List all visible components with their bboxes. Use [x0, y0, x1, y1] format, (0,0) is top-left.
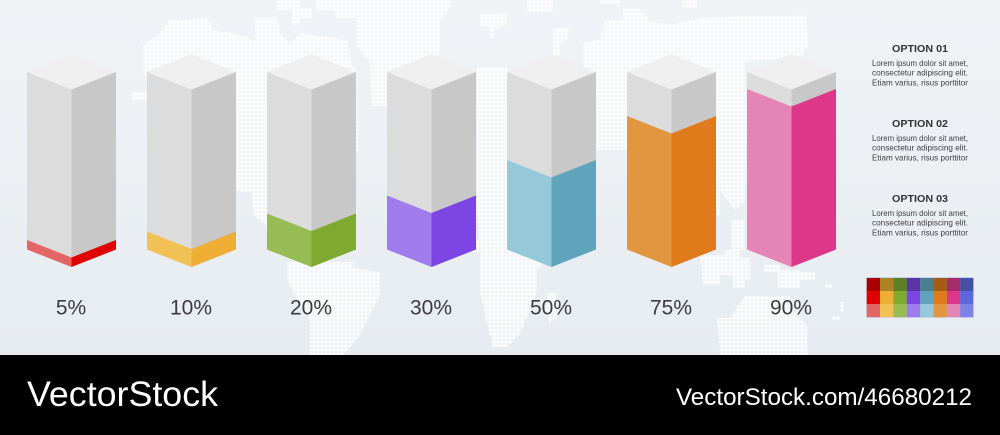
option 02 text: OPTION 02: [892, 118, 948, 130]
bar 10%: [147, 54, 236, 320]
footer image id: VectorStock.com/46680212: [676, 384, 972, 411]
bar 50%: 50%: [530, 296, 572, 320]
option 01 text: [872, 43, 968, 87]
bar 30%: 30%: [410, 296, 452, 320]
option 03 text: Etiam varius, risus porttitor: [872, 227, 968, 237]
bar 20%: [267, 54, 356, 320]
colour palette swatch: [866, 278, 974, 318]
bar 5%: 5%: [56, 296, 86, 320]
footer band: [0, 355, 1000, 435]
bar 90%: 90%: [770, 296, 812, 320]
bar 20%: 20%: [290, 296, 332, 320]
option 01 text: Lorem ipsum dolor sit amet,: [872, 58, 968, 68]
option 02 text: Etiam varius, risus porttitor: [872, 152, 968, 162]
option 03 text: OPTION 03: [892, 193, 948, 205]
bar 75%: 75%: [650, 296, 692, 320]
option 02 text: consectetur adipiscing elit.: [872, 143, 968, 153]
option 03 text: Lorem ipsum dolor sit amet,: [872, 208, 968, 218]
option 01 text: OPTION 01: [892, 43, 948, 55]
option 02 text: Lorem ipsum dolor sit amet,: [872, 133, 968, 143]
option 03 text: consectetur adipiscing elit.: [872, 218, 968, 228]
footer logo text: VectorStock: [27, 375, 219, 414]
bar 75%: [627, 54, 716, 320]
option 03 text: [872, 193, 968, 237]
bar 50%: [507, 54, 596, 320]
option 02 text: [872, 118, 968, 162]
option 01 text: consectetur adipiscing elit.: [872, 68, 968, 78]
bar 90%: [747, 54, 836, 320]
dotted world map: [132, 0, 844, 355]
bar 30%: [387, 54, 476, 320]
bar 5%: [27, 54, 116, 320]
bar 10%: 10%: [170, 296, 212, 320]
option 01 text: Etiam varius, risus porttitor: [872, 77, 968, 87]
